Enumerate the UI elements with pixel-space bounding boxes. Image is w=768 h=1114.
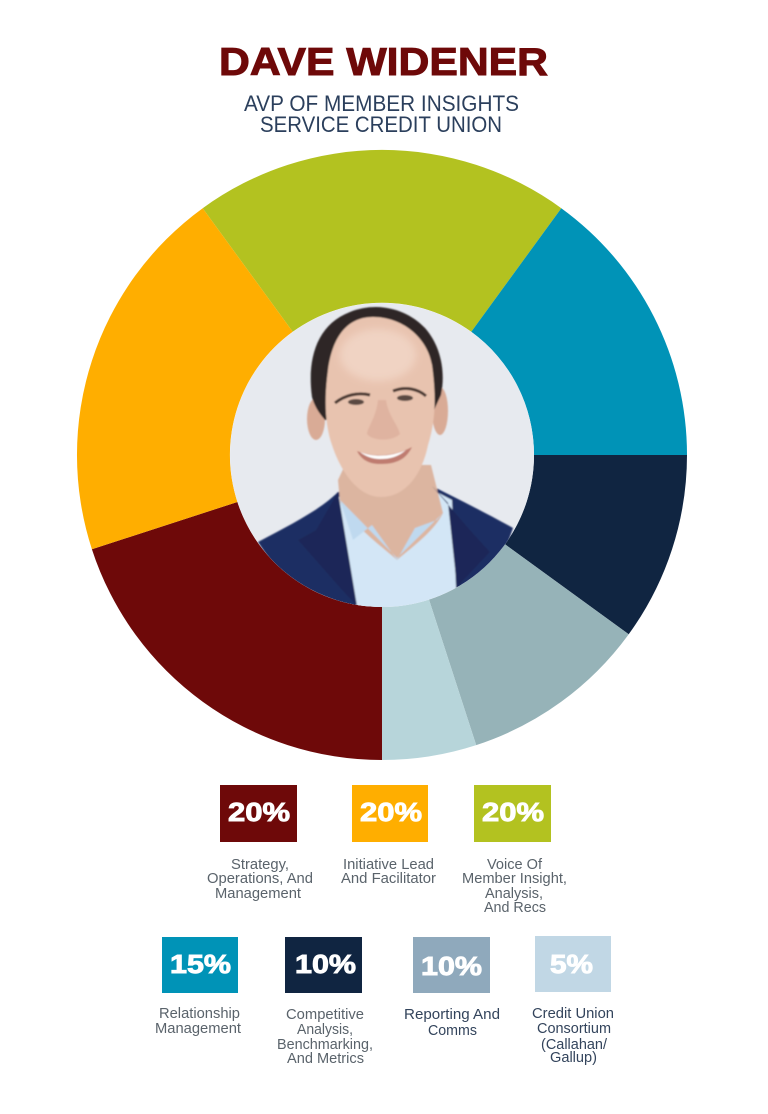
- segment: credit union consortium 5%: [382, 600, 476, 760]
- legend: credit union consortium: Gallup): [550, 1050, 597, 1066]
- legend: competitive analysis: [277, 937, 373, 1067]
- segment: relationship management 15%: [471, 208, 687, 455]
- legend: competitive analysis: And Metrics: [287, 1051, 364, 1067]
- legend: relationship management: Management: [155, 1021, 241, 1037]
- segment: reporting and comms 10%: [429, 544, 629, 745]
- legend: reporting and comms: [404, 937, 500, 1039]
- legend: credit union consortium: Consortium: [537, 1021, 611, 1037]
- legend: voice of member: 20%: [482, 797, 544, 827]
- subtitle: SERVICE CREDIT UNION: [260, 112, 502, 137]
- portrait photo: [228, 301, 536, 620]
- legend: reporting and comms: 10%: [421, 951, 482, 981]
- legend: relationship management: Relationship: [159, 1006, 240, 1022]
- legend: credit union consortium: (Callahan/: [541, 1037, 608, 1053]
- legend: credit union consortium: 5%: [550, 949, 593, 979]
- subtitle: AVP OF MEMBER INSIGHTS: [244, 91, 519, 116]
- legend: initiative lead: Initiative Lead: [343, 857, 434, 873]
- legend: reporting and comms: Comms: [428, 1023, 477, 1039]
- segment: competitive analysis 10%: [505, 455, 687, 634]
- segment: voice of member 20%: [203, 150, 561, 332]
- legend: competitive analysis: 10%: [295, 949, 356, 979]
- title: DAVE WIDENER: [219, 41, 548, 84]
- segment: strategy 20%: [92, 502, 382, 760]
- legend: strategy: 20%: [228, 797, 290, 827]
- legend: initiative lead: And Facilitator: [341, 871, 436, 887]
- legend: voice of member: Voice Of: [487, 857, 543, 873]
- legend: voice of member: Analysis,: [485, 886, 543, 902]
- legend: strategy: Strategy,: [231, 857, 289, 873]
- legend: competitive analysis: Analysis,: [297, 1022, 353, 1038]
- legend: reporting and comms: Reporting And: [404, 1007, 500, 1023]
- legend: voice of member: Member Insight,: [462, 871, 567, 887]
- legend: credit union consortium: [532, 936, 614, 1066]
- legend: strategy: [207, 785, 313, 902]
- segment: initiative lead 20%: [77, 208, 293, 549]
- legend: initiative lead: [341, 785, 436, 887]
- legend: voice of member: And Recs: [484, 900, 546, 916]
- legend: competitive analysis: Competitive: [286, 1007, 364, 1023]
- legend: voice of member: [462, 785, 567, 916]
- legend: strategy: Management: [215, 886, 301, 902]
- legend: strategy: Operations, And: [207, 871, 313, 887]
- legend: relationship management: [155, 937, 241, 1037]
- legend: initiative lead: 20%: [360, 797, 422, 827]
- legend: competitive analysis: Benchmarking,: [277, 1037, 373, 1053]
- subtitle: [244, 91, 519, 137]
- legend: credit union consortium: Credit Union: [532, 1006, 614, 1022]
- donut chart: [77, 150, 687, 760]
- legend: relationship management: 15%: [170, 949, 231, 979]
